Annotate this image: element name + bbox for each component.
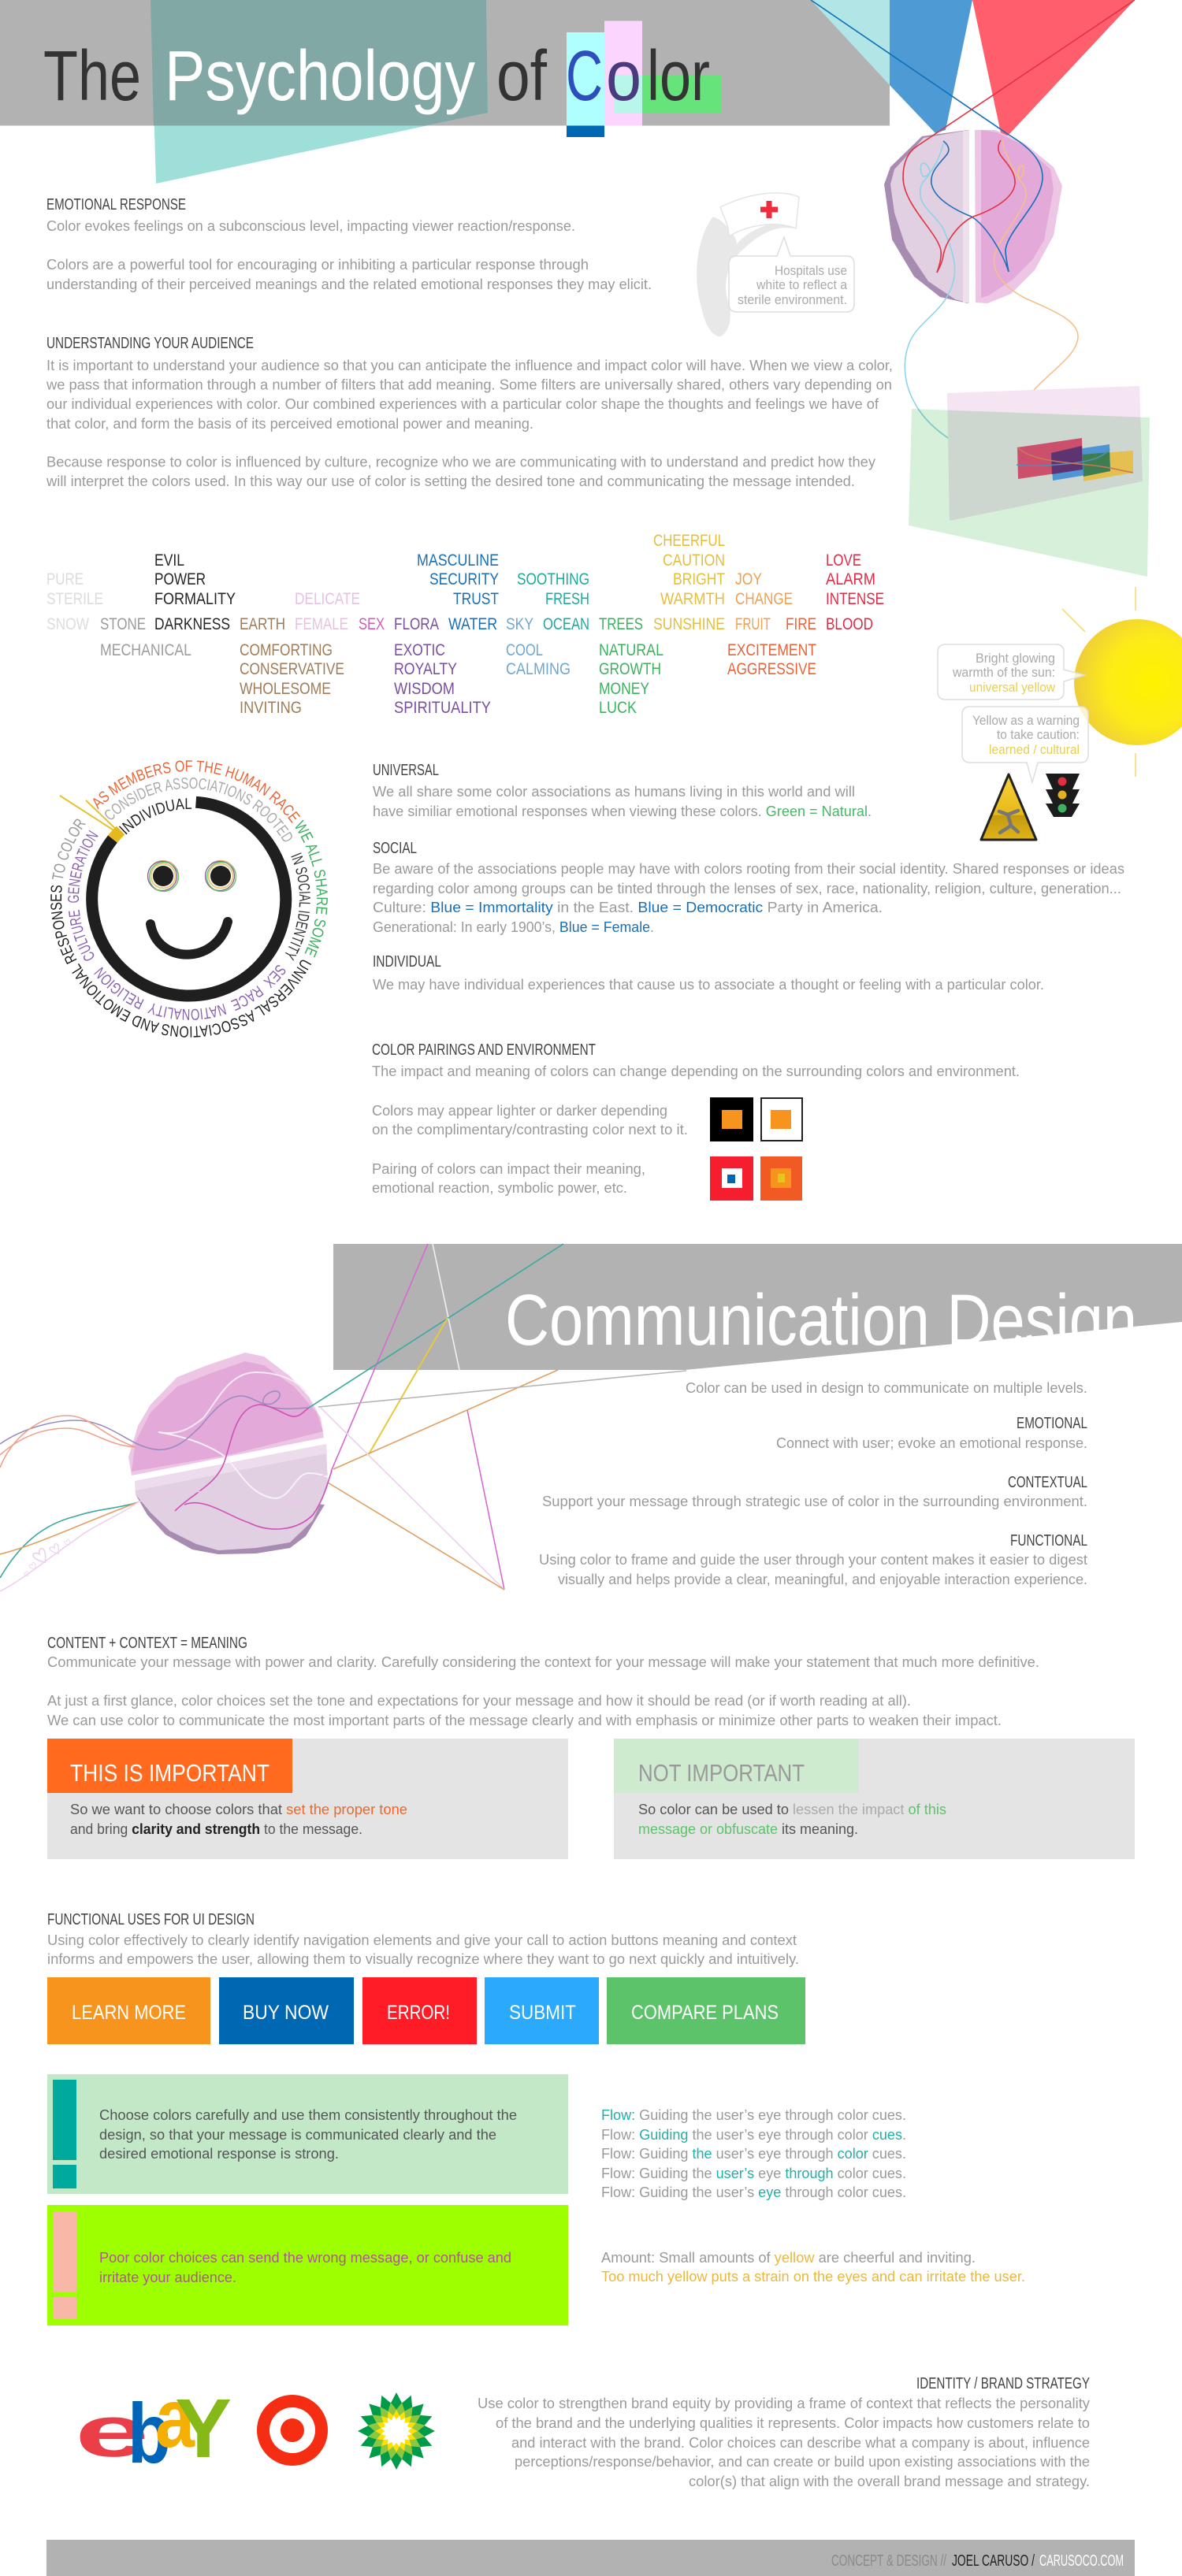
grey column: MECHANICAL [100, 641, 191, 659]
body text: informs and empowers the user, allowing them to visually recognize where they want to go next quickly and intuitively. [47, 1951, 799, 1967]
body text: understanding of their perceived meanings and the related emotional responses they may elicit. [46, 276, 652, 292]
bubble text: sterile environment. [738, 292, 847, 307]
header band: the psychology of color [0, 0, 890, 184]
blue column: SECURITY [429, 570, 499, 588]
green column: GROWTH [599, 660, 661, 678]
logo: ebay: b [128, 2385, 171, 2481]
brown column [240, 615, 344, 717]
crimson, blue and yellow filters [1017, 438, 1133, 481]
callout: universal yellow [938, 644, 1085, 700]
brain left hemisphere [884, 130, 969, 303]
button: compare plans: COMPARE PLANS [631, 2002, 779, 2024]
light teal beam [811, 0, 890, 85]
black column: EVIL [154, 551, 184, 570]
functional text [539, 1551, 1087, 1587]
callout text: universal yellow [969, 680, 1056, 695]
section: social [373, 840, 1124, 935]
grey column [100, 615, 191, 659]
icon: exclamation mark [53, 2211, 76, 2319]
body text: and interact with the brand. Color choices can describe what a company is about, influence [511, 2434, 1090, 2451]
body text: we pass that information through a number of filters that add meaning. Some filters are universally shared, others vary depending on [46, 377, 892, 392]
heading: SOCIAL [373, 840, 417, 857]
logo: ebay: Y [175, 2382, 232, 2475]
orange column [735, 570, 793, 633]
green column: TREES [599, 615, 643, 633]
swatches: orange on black and white [710, 1097, 802, 1141]
black column: FORMALITY [154, 590, 236, 608]
teal translucent wedge [151, 0, 488, 184]
green column [599, 615, 663, 717]
red-orange column [727, 615, 816, 678]
brain right hemisphere [975, 130, 1062, 303]
red-orange column: EXCITEMENT [727, 641, 816, 659]
body text [46, 217, 652, 292]
body text: We may have individual experiences that cause us to associate a thought or feeling with a particular color. [373, 976, 1044, 993]
heading: IDENTITY / BRAND STRATEGY [916, 2375, 1090, 2392]
nerve lines entering filters [1017, 447, 1133, 473]
red column: LOVE [826, 551, 861, 570]
callout text: learned / cultural [989, 742, 1080, 757]
body text [372, 1063, 1020, 1196]
credit text: CARUSOCO.COM [1039, 2552, 1124, 2570]
teal column [517, 570, 589, 633]
emotional text: Connect with user; evoke an emotional response. [776, 1435, 1087, 1451]
heading: FUNCTIONAL USES FOR UI DESIGN [47, 1911, 255, 1928]
circular text: social ring: IN SOCIAL IDENTITY [285, 852, 310, 961]
text block: flow [601, 2106, 906, 2200]
emotional heading: EMOTIONAL [1017, 1415, 1087, 1432]
bubble [938, 644, 1085, 700]
left eye [148, 860, 178, 892]
green column: NATURAL [599, 641, 663, 659]
red column: ALARM [826, 570, 875, 588]
teal column: SOOTHING [517, 570, 589, 588]
orange heading block [47, 1739, 292, 1793]
panel text: design, so that your message is communicated clearly and the [99, 2126, 496, 2143]
sky blue column [506, 615, 571, 678]
section: universal [373, 762, 872, 819]
pale pink column: DELICATE [295, 590, 360, 608]
panel background [47, 2074, 568, 2194]
blue column: MASCULINE [417, 551, 499, 570]
brown column: WHOLESOME [240, 680, 331, 698]
credit text [831, 2552, 1124, 2570]
circular text: individual: INDIVIDUAL [119, 798, 192, 835]
body text: have similiar emotional responses when viewing these colors. Green = Natural. [373, 803, 872, 819]
functional text: visually and helps provide a clear, meaningful, and enjoyable interaction experience. [558, 1571, 1087, 1587]
bubble text: white to reflect a [756, 277, 848, 292]
radiating straight lines [309, 1244, 686, 1590]
callout lines [60, 796, 122, 835]
body text: Because response to color is influenced by culture, recognize who we are communicating with to understand and predict how they [46, 454, 876, 470]
magenta word: SEX [359, 615, 385, 633]
icon: exclamation mark [53, 2080, 76, 2188]
sky blue column: COOL [506, 641, 543, 659]
purple column: EXOTIC [394, 641, 445, 659]
body text [478, 2395, 1091, 2489]
yellow column [653, 532, 725, 633]
heading: UNIVERSAL [373, 762, 439, 779]
hearts along line [24, 1539, 72, 1577]
circular text: universal ring: AS MEMBERS OF THE HUMAN RACE [93, 760, 301, 823]
section: identity / brand strategy [478, 2375, 1091, 2489]
button: submit [485, 1977, 599, 2044]
panel text [70, 1801, 407, 1837]
button: error [362, 1977, 477, 2044]
circular text: social ring: CONSIDER ASSOCIATIONS ROOTED [105, 778, 292, 841]
panel background [614, 1739, 1135, 1859]
title colour blocks [567, 20, 722, 137]
panel text: Poor color choices can send the wrong message, or confuse and [99, 2249, 511, 2266]
ring yellow accent [113, 830, 121, 839]
panel text [99, 2106, 517, 2162]
black column: POWER [154, 570, 206, 588]
title: lor [647, 37, 710, 116]
section: content + context = meaning [47, 1635, 1039, 1728]
flowing curves [0, 1372, 332, 1591]
sun rays [1062, 587, 1136, 777]
body text: that color, and form the basis of its perceived emotional power and meaning. [46, 415, 533, 432]
red column: BLOOD [826, 615, 873, 633]
contextual heading: CONTEXTUAL [1008, 1474, 1087, 1491]
intro text: Color can be used in design to communicate on multiple levels. [686, 1379, 1087, 1396]
swatches: colour pairings [710, 1156, 802, 1201]
panel text: and bring clarity and strength to the message. [70, 1821, 362, 1837]
body text: our individual experiences with color. Our combined experiences with a particular color shape the thoughts and feelings we have of [46, 395, 879, 412]
panel background [47, 2205, 568, 2325]
circular text: social ring: CULTURE GENERATION [68, 830, 98, 961]
falling figure [999, 811, 1018, 833]
title [43, 37, 710, 116]
body text: regarding color among groups can be tinted through the lenses of sex, race, nationality, religion, culture, generation... [373, 880, 1121, 896]
yellow column: CAUTION [663, 551, 725, 570]
credit text: JOEL CARUSO / [952, 2552, 1035, 2570]
blue column [417, 551, 499, 633]
brain upper half [128, 1353, 324, 1475]
white column [46, 570, 103, 633]
red-orange column: FIRE [786, 615, 816, 633]
body text [373, 860, 1124, 935]
button: submit: SUBMIT [509, 2002, 576, 2024]
body text: of the brand and the underlying qualities it represents. Color impacts how customers relate to [496, 2415, 1090, 2431]
logo: ebay: a [155, 2372, 195, 2465]
title: C [566, 37, 603, 116]
heading text: NOT IMPORTANT [638, 1759, 805, 1787]
body text: perceptions/response/behavior, and can create or build upon existing associations with the [515, 2453, 1090, 2470]
logo: target [257, 2395, 328, 2466]
colour word association table [46, 532, 884, 717]
footer [46, 2540, 1135, 2576]
black column: DARKNESS [154, 615, 230, 633]
body text: The impact and meaning of colors can change depending on the surrounding colors and environment. [372, 1063, 1020, 1079]
body text [47, 1654, 1039, 1728]
white column: PURE [46, 570, 84, 588]
panel: good colour choices [47, 2074, 568, 2194]
grey banner [333, 1244, 1182, 1370]
body text: Be aware of the associations people may have with colors rooting from their social identity. Shared responses or ideas [373, 860, 1124, 877]
title: o [606, 37, 641, 116]
panel text: Choose colors carefully and use them consistently throughout the [99, 2106, 517, 2123]
callout text: to take caution: [997, 727, 1080, 742]
text block: flow: Flow: Guiding the user’s eye through color cues. [601, 2184, 906, 2200]
logo: bp helios [358, 2392, 435, 2470]
footer bar [46, 2540, 1135, 2576]
panel text: So we want to choose colors that set the proper tone [70, 1801, 407, 1817]
title: The [43, 37, 141, 116]
smile [151, 922, 228, 955]
section: individual [373, 953, 1044, 993]
body text: We all share some color associations as humans living in this world and will [373, 783, 855, 800]
green column: LUCK [599, 699, 637, 717]
panel text: So color can be used to lessen the impact of this [638, 1801, 946, 1817]
text block: flow: Flow: Guiding the user’s eye through color cues. [601, 2106, 906, 2123]
white column: STERILE [46, 590, 103, 608]
right eye [205, 860, 236, 892]
brown column: EARTH [240, 615, 285, 633]
purple column: ROYALTY [394, 660, 457, 678]
functional heading: FUNCTIONAL [1010, 1532, 1087, 1550]
pale pink column [295, 590, 360, 633]
brain lower half [135, 1444, 328, 1554]
white column: SNOW [46, 615, 89, 633]
callout text: warmth of the sun: [952, 665, 1055, 680]
heading: COLOR PAIRINGS AND ENVIRONMENT [372, 1041, 596, 1059]
panel text: message or obfuscate its meaning. [638, 1821, 858, 1837]
section: emotional response [46, 196, 652, 292]
grey column: STONE [100, 615, 146, 633]
bubble text: Hospitals use [775, 263, 847, 278]
nurse cap [720, 193, 799, 236]
header grey banner [0, 0, 890, 126]
panel: not important [614, 1739, 1135, 1859]
section header: communication design [333, 1244, 1182, 1370]
purple column: FLORA [394, 615, 439, 633]
button: error: ERROR! [387, 2002, 450, 2024]
circular text: universal ring [50, 760, 328, 1037]
panel text: desired emotional response is strong. [99, 2145, 339, 2162]
body text: color(s) that align with the overall brand message and strategy. [689, 2473, 1090, 2489]
callout text [952, 651, 1056, 695]
text block: amount of yellow [601, 2249, 1025, 2285]
icon: sun with rays [1062, 587, 1182, 777]
sky blue column: SKY [506, 615, 533, 633]
logo: ebay [75, 2372, 232, 2481]
body text: will interpret the colors used. In this way our use of color is setting the desired tone and communicating the message intended. [46, 473, 855, 489]
body text [46, 357, 893, 489]
text block: amount of yellow: Amount: Small amounts of yellow are cheerful and inviting. [601, 2249, 976, 2266]
button: learn more: LEARN MORE [72, 2002, 186, 2024]
illustration: light beams into brain [811, 0, 1135, 473]
purple column: SPIRITUALITY [394, 699, 491, 717]
button: buy now: BUY NOW [243, 2002, 329, 2024]
callout: warning yellow [962, 707, 1088, 782]
yellow column: BRIGHT [673, 570, 725, 588]
title: of [496, 37, 548, 116]
button: learn more [47, 1977, 210, 2044]
panel text [99, 2249, 511, 2285]
brown column: COMFORTING [240, 641, 333, 659]
heading: UNDERSTANDING YOUR AUDIENCE [46, 335, 254, 352]
circular text: social ring [68, 778, 310, 1020]
brown column: INVITING [240, 699, 302, 717]
body text: We can use color to communicate the most important parts of the message clearly and with emphasis or minimize other parts to weaken their impact. [47, 1712, 1002, 1728]
blue column: WATER [448, 615, 497, 633]
icon: nurse with speech bubble [697, 193, 854, 336]
illustration: brain with converging lines [0, 1244, 686, 1591]
blue column: TRUST [453, 590, 499, 608]
body text: emotional reaction, symbolic power, etc. [372, 1179, 627, 1196]
text block: flow: Flow: Guiding the user’s eye through color cues. [601, 2165, 906, 2181]
circular text: universal ring: UNIVERSAL ASSOCIATIONS AND EMOTIONAL RESPONSES [50, 885, 312, 1037]
body text: Using color effectively to clearly identify navigation elements and give your call to action buttons meaning and context [47, 1932, 797, 1948]
callout text: Bright glowing [976, 651, 1055, 666]
yellow column: SUNSHINE [653, 615, 725, 633]
sun disc [1074, 619, 1182, 745]
panel: this is important [47, 1739, 568, 1859]
body text: Color evokes feelings on a subconscious level, impacting viewer reaction/response. [46, 217, 575, 234]
section: functional uses for ui design [47, 1911, 799, 1967]
heading: EMOTIONAL RESPONSE [46, 196, 186, 213]
icon: traffic light [1046, 774, 1080, 817]
section: understanding your audience [46, 335, 893, 489]
red beam [972, 0, 1135, 140]
bubble [962, 707, 1088, 782]
bubble text [738, 263, 848, 307]
red cross [760, 201, 778, 218]
smiley face with circular text [50, 760, 328, 1037]
green plane [909, 409, 1150, 577]
nurse hair [697, 217, 792, 336]
panel background [47, 1739, 568, 1859]
orange column: CHANGE [735, 590, 793, 608]
speech bubble [729, 237, 854, 312]
icon: warning triangle [981, 774, 1036, 840]
body text: It is important to understand your audience so that you can anticipate the influence and impact color will have. When we view a color, [46, 357, 893, 373]
text block: flow: Flow: Guiding the user’s eye through color cues. [601, 2126, 906, 2143]
circular text: social ring: SEX RACE NATIONALITY RELIGION [94, 965, 285, 1020]
sky blue column: CALMING [506, 660, 571, 678]
green column: MONEY [599, 680, 649, 698]
teal column: FRESH [545, 590, 589, 608]
black column [154, 551, 236, 633]
red column [826, 551, 884, 633]
blue beam [890, 0, 972, 133]
face ring [92, 802, 286, 996]
pale pink column: FEMALE [295, 615, 348, 633]
panel text: irritate your audience. [99, 2269, 236, 2285]
heading: INDIVIDUAL [373, 953, 441, 971]
section: color pairings and environment [372, 1041, 1020, 1201]
functional text: Using color to frame and guide the user through your content makes it easier to digest [539, 1551, 1087, 1568]
button: buy now [219, 1977, 354, 2044]
circular text: universal ring: TO COLOR [52, 819, 86, 879]
yellow column: WARMTH [660, 590, 725, 608]
body text: Colors are a powerful tool for encouraging or inhibiting a particular response through [46, 256, 589, 273]
red-orange column: AGGRESSIVE [727, 660, 816, 678]
pink plane [947, 386, 1143, 521]
teal column: OCEAN [543, 615, 589, 633]
body text: Pairing of colors can impact their meaning, [372, 1160, 645, 1177]
button: compare plans [607, 1977, 805, 2044]
purple column: WISDOM [394, 680, 455, 698]
yellow column: CHEERFUL [653, 532, 725, 550]
body text: Use color to strengthen brand equity by providing a frame of context that reflects the personality [478, 2395, 1091, 2411]
orange column: JOY [735, 570, 762, 588]
text block: amount of yellow: Too much yellow puts a strain on the eyes and can irritate the user. [601, 2268, 1025, 2285]
section: communication levels [539, 1379, 1087, 1587]
illustration: overlapping colour planes [909, 386, 1150, 577]
body text: At just a first glance, color choices set the tone and expectations for your message and how it should be read (or if worth reading at all). [47, 1692, 911, 1709]
body text: Culture: Blue = Immortality in the East. Blue = Democratic Party in America. [373, 899, 883, 915]
orange column: FRUIT [735, 615, 771, 633]
body text: on the complimentary/contrasting color next to it. [372, 1121, 688, 1138]
panel: poor colour choices [47, 2205, 568, 2325]
panel text [638, 1801, 946, 1837]
body text [373, 783, 872, 819]
heading text: THIS IS IMPORTANT [70, 1759, 269, 1787]
credit text: CONCEPT & DESIGN // [831, 2552, 946, 2570]
callout text: Yellow as a warning [972, 713, 1080, 728]
title: Psychology [165, 37, 475, 116]
contextual text: Support your message through strategic use of color in the surrounding environment. [542, 1493, 1087, 1509]
body text: Colors may appear lighter or darker depending [372, 1102, 667, 1119]
brown column: CONSERVATIVE [240, 660, 344, 678]
red column: INTENSE [826, 590, 884, 608]
purple column [394, 615, 491, 717]
logo: ebay: e [75, 2392, 149, 2472]
body text [47, 1932, 799, 1967]
body text: Generational: In early 1900’s, Blue = Female. [373, 919, 654, 935]
text block: flow: Flow: Guiding the user’s eye through color cues. [601, 2145, 906, 2162]
body text: Communicate your message with power and clarity. Carefully considering the context for your message will make your statement that much more definitive. [47, 1654, 1039, 1670]
nerve lines [811, 0, 1135, 473]
heading: CONTENT + CONTEXT = MEANING [47, 1635, 247, 1652]
circular text: universal ring: WE ALL SHARE SOME [295, 819, 328, 958]
callout text [972, 713, 1080, 757]
green heading block [614, 1739, 859, 1793]
